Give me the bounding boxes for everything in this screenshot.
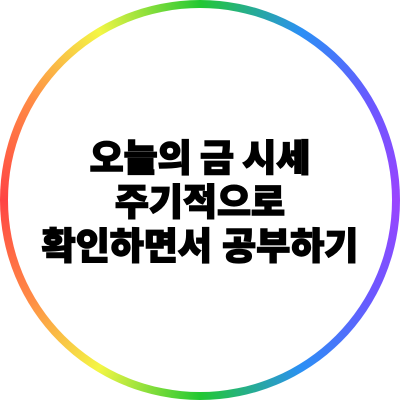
title line 1: 오늘의 금 시세 bbox=[90, 138, 310, 179]
title line 2: 주기적으로 bbox=[115, 182, 285, 223]
title line 3: 확인하면서 공부하기 bbox=[42, 226, 358, 267]
